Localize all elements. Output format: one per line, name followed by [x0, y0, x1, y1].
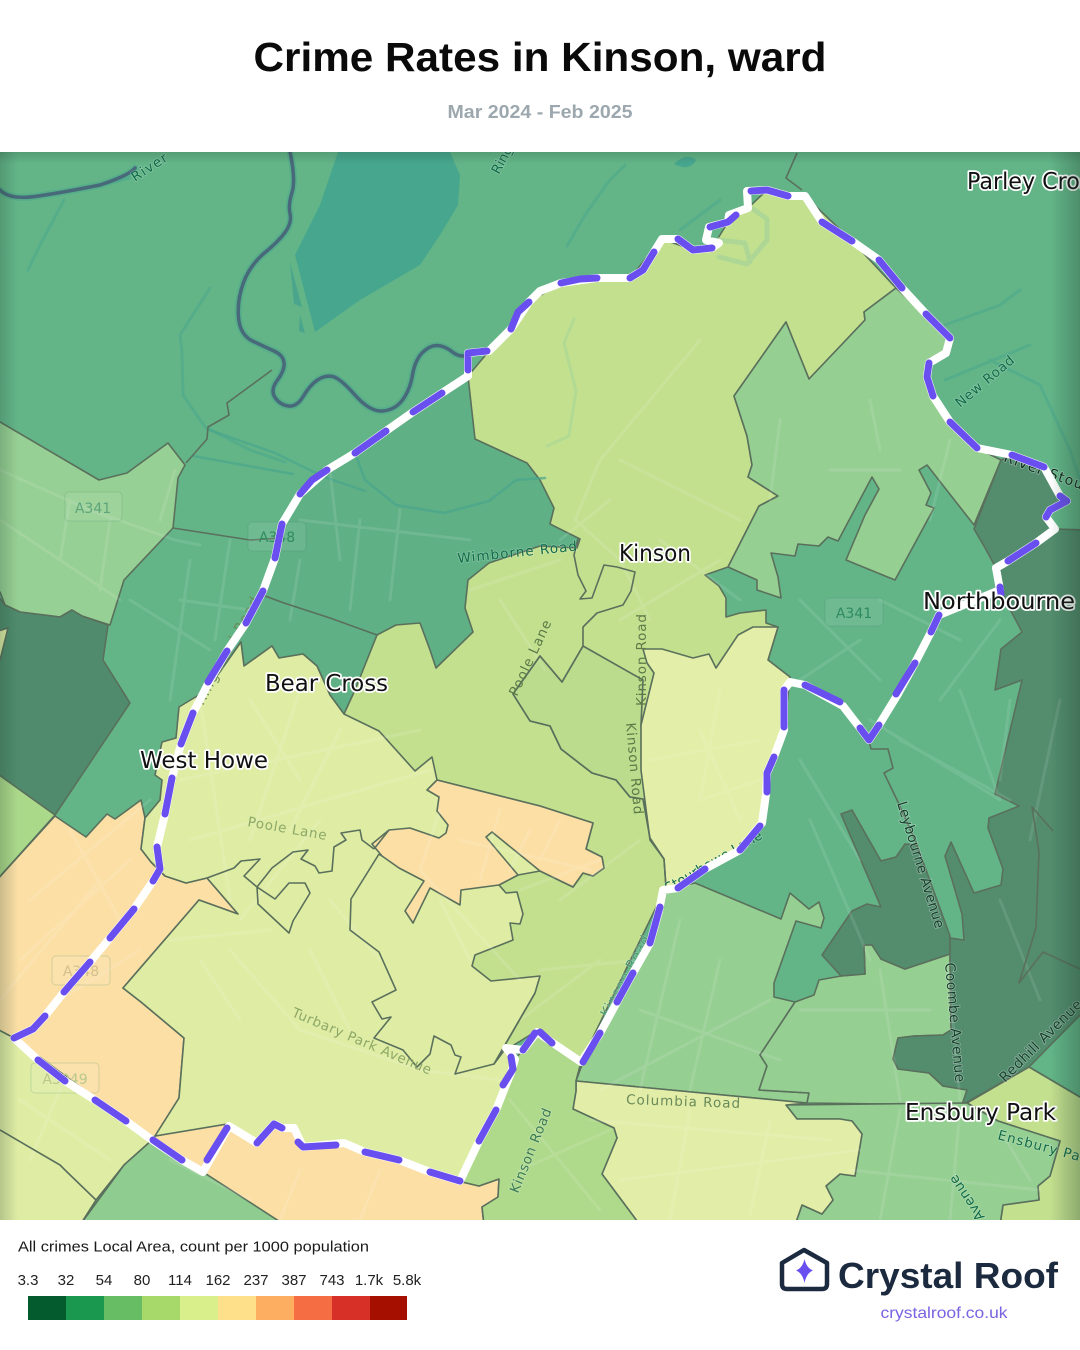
area: south-west pale	[0, 1028, 152, 1225]
website: crystalroof.co.uk	[880, 1305, 1009, 1322]
road labels: Columbia Road	[626, 1092, 740, 1112]
area: south-east light green	[576, 883, 824, 1103]
area: west pale sliver	[0, 628, 8, 662]
road labels: Ringwood Road	[192, 594, 263, 708]
river	[0, 152, 468, 411]
place labels: Bear Cross	[265, 671, 388, 697]
ward streams	[193, 209, 767, 513]
place labels: Ensbury Park	[905, 1100, 1057, 1126]
road shields: A341	[836, 606, 872, 622]
area: West Howe pale	[123, 642, 604, 1181]
area: west light green wedge	[0, 772, 55, 882]
area: A341 west light green	[0, 419, 185, 625]
area: south orange strip	[152, 1124, 499, 1225]
place labels	[140, 169, 1080, 1126]
ward boundary	[14, 190, 1067, 1181]
road labels: Poole Lane	[506, 618, 555, 699]
place labels: Northbourne	[923, 589, 1075, 615]
road labels	[128, 143, 1080, 1224]
area: east pale pocket	[641, 627, 790, 888]
road shields	[31, 492, 883, 1093]
place labels: West Howe	[140, 748, 268, 774]
road shields: A348	[259, 530, 295, 546]
area: north-east dark block	[973, 458, 1060, 565]
legend tick labels: 54	[96, 1272, 112, 1289]
road labels: Kinson Road	[597, 933, 654, 1020]
boundary: purple dashes	[14, 190, 1067, 1181]
area: central dark block	[822, 810, 950, 976]
wordmark: Crystal Roof	[838, 1255, 1059, 1296]
icon: house with star	[782, 1250, 827, 1289]
road labels: Ring	[488, 143, 517, 177]
area: east light green	[759, 945, 967, 1105]
boundary: white base line	[14, 190, 1067, 1181]
road labels: Kinson Road	[507, 1106, 555, 1195]
logo: Crystal Roof	[782, 1250, 1059, 1322]
legend colour scale	[28, 1296, 407, 1320]
area: far east medium strip	[1031, 1067, 1080, 1096]
road labels: Leybourne Avenue	[893, 799, 947, 930]
place labels: Kinson	[619, 541, 691, 567]
legend tick labels: 1.7k	[355, 1272, 384, 1289]
legend tick labels: 162	[205, 1272, 231, 1289]
area: Columbia Road pale	[573, 1081, 862, 1225]
area: west orange	[0, 800, 238, 1140]
legend	[18, 1238, 422, 1320]
legend tick labels: 114	[168, 1272, 192, 1289]
area boundary lines	[0, 153, 1080, 1200]
area: north-east light green	[728, 288, 1001, 598]
lake	[295, 152, 460, 332]
legend title: All crimes Local Area, count per 1000 population	[18, 1238, 369, 1256]
area: Kinson north yellow green	[300, 190, 896, 1064]
legend tick labels: 80	[134, 1272, 150, 1289]
roads	[0, 340, 1060, 1220]
road labels: River	[128, 150, 171, 185]
road labels: Poole Lane	[246, 814, 328, 844]
subtitle: date range: Mar 2024 - Feb 2025	[448, 101, 632, 122]
road labels: Coombe Avenue	[941, 962, 967, 1083]
area: south light green	[84, 1142, 276, 1220]
road labels: Turbary Park Avenue	[289, 1005, 434, 1078]
legend tick labels: 237	[243, 1272, 269, 1289]
legend tick labels: 3.3	[18, 1272, 38, 1289]
legend tick labels: 387	[281, 1272, 307, 1289]
road labels: New Road	[952, 353, 1018, 411]
title: Crime Rates in Kinson, ward	[254, 34, 826, 80]
road labels: Avenue	[946, 1172, 988, 1224]
road shields: A341	[75, 501, 111, 517]
area: north-west ward medium green	[207, 376, 580, 714]
road labels: Wimborne Road	[457, 539, 578, 567]
map edge shading	[0, 152, 1080, 1220]
streams	[28, 157, 1080, 480]
road labels: Kinson Road	[634, 614, 650, 706]
legend tick labels: 743	[319, 1272, 345, 1289]
road shields: A348	[63, 964, 99, 980]
area: Kinson south zone	[513, 646, 650, 838]
legend tick labels	[18, 1272, 422, 1289]
area: central orange	[372, 780, 604, 923]
legend tick labels: 32	[58, 1272, 74, 1289]
road labels: Kinson Road	[622, 722, 646, 815]
area: eastern dark block	[893, 529, 1080, 1105]
area: south-east pale	[967, 1067, 1080, 1225]
area: Ensbury light green	[786, 1103, 1060, 1225]
road shields: A3049	[42, 1072, 88, 1088]
area: Kinson Road green	[458, 1033, 640, 1225]
area: west dark high-density block	[0, 592, 130, 815]
road labels: Stourhowe Lane	[662, 828, 765, 896]
legend tick labels: 5.8k	[393, 1272, 422, 1289]
